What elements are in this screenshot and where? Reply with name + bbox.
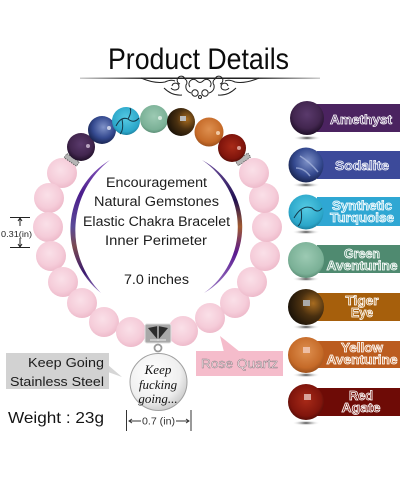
legend: tiger eye: Tiger [346,293,378,308]
pendant width dimension: 0.7 (in) [142,416,175,428]
legend: green aventurine: Green [344,246,380,261]
tiger eye bead [167,108,195,136]
legend: red agate: Red [349,388,373,403]
legend: amethyst: Amethyst [330,112,393,127]
legend: green aventurine [288,242,400,282]
pink callout: Rose Quartz [201,356,278,371]
gray callout [6,353,122,389]
center text: Inner Perimeter [105,233,208,248]
bead size dimension: 0.31(in) [1,229,32,239]
legend: tiger eye: Eye [351,305,373,320]
green aventurine bead [140,105,168,133]
charm pendant: going... [138,391,178,406]
center text: 7.0 inches [124,272,189,287]
weight: Weight : 23g [8,410,104,427]
gray callout: Stainless Steel [10,374,104,389]
legend: turquoise: Turquoise [330,210,394,225]
charm pendant: Keep [144,362,172,377]
legend: sodalite: Sodalite [335,158,389,173]
legend: amethyst [290,101,400,140]
center text: Encouragement [106,175,207,190]
legend: turquoise: Synthetic [332,198,392,213]
spacer beads [64,153,251,166]
rose quartz beads [33,158,282,347]
gray callout: Keep Going [28,355,104,370]
yellow aventurine bead [194,118,224,146]
charm pendant [130,324,187,410]
turquoise bead [112,107,140,135]
legend: turquoise [288,194,400,234]
pendant width dimension [126,410,191,431]
sodalite bead [88,116,116,144]
charm pendant: fucking [139,377,178,392]
amethyst bead [67,133,95,161]
legend: sodalite [288,148,400,188]
legend: red agate [288,384,400,426]
legend: tiger eye [288,289,400,330]
crescent left [70,160,110,293]
bead size dimension [1,218,32,248]
legend: green aventurine: Aventurine [326,258,398,273]
center text [83,175,230,287]
ornamental divider [80,76,320,98]
center text: Natural Gemstones [94,194,219,209]
center text: Elastic Chakra Bracelet [83,214,230,229]
crescent right [202,160,242,293]
pink callout [196,336,283,376]
legend: red agate: Agate [342,400,380,415]
red agate bead [218,134,246,162]
legend: yellow aventurine: Aventurine [326,352,398,367]
title: Product Details [108,43,289,76]
legend: yellow aventurine: Yellow [341,340,384,355]
bracelet [33,105,282,347]
legend: yellow aventurine [288,337,400,378]
